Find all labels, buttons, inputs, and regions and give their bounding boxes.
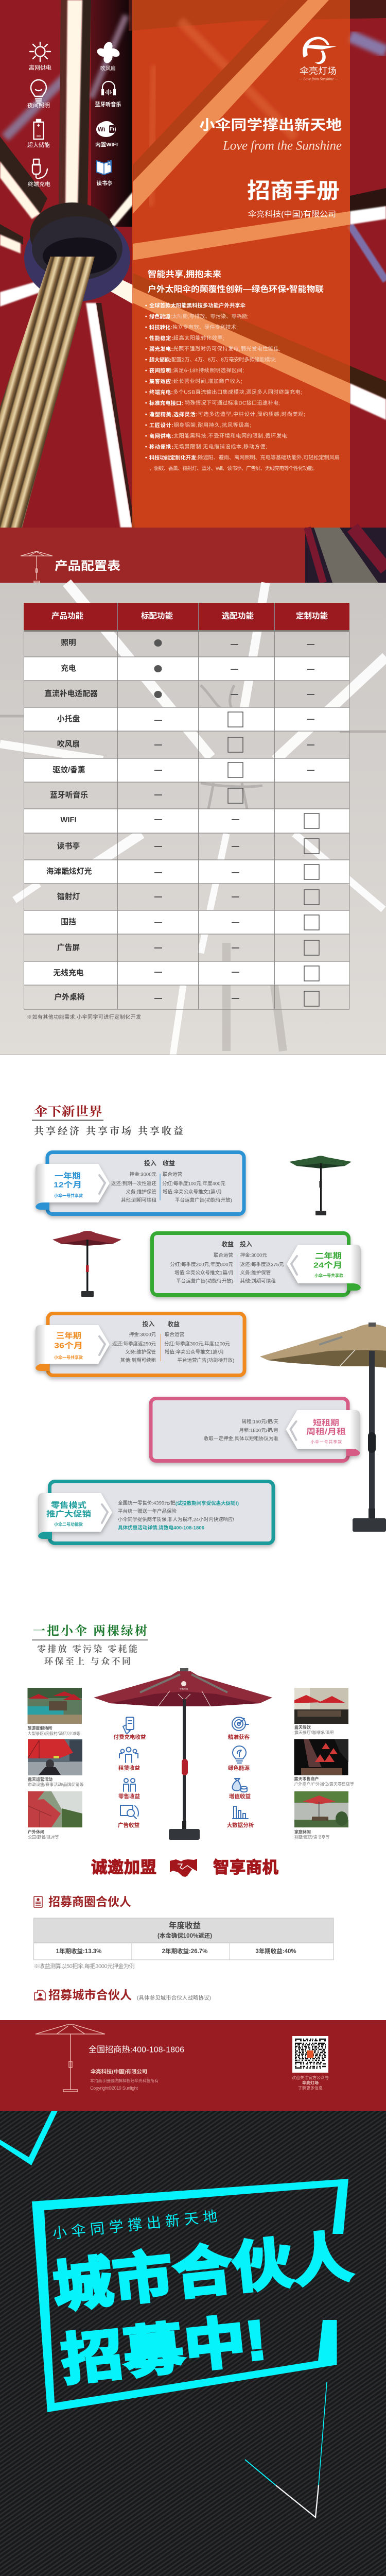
table header: 选配功能 (222, 611, 254, 620)
table grid (24, 603, 349, 1009)
feature list: • (145, 444, 147, 450)
row labels: WIFI (60, 816, 77, 824)
red umbrella product image (52, 1231, 121, 1297)
terms text: 月租:1800元/把/月 (239, 1427, 278, 1433)
terms text (111, 1159, 232, 1204)
icon: paid charging (123, 1717, 134, 1733)
icon: wifi cloud: Wi (98, 126, 105, 133)
ribbon tag (38, 1493, 112, 1539)
dash marks (154, 644, 314, 999)
row labels (44, 638, 98, 1002)
terms text: 收益 (163, 1159, 175, 1167)
icon: big data (233, 1806, 248, 1819)
terms text: 分红:每季度300元,年度1200元 (164, 1341, 230, 1347)
annual income table (34, 1918, 334, 1960)
term label: 推广大促销 (46, 1510, 91, 1519)
feature list: • (145, 434, 147, 439)
label: paid charging: 付费充电收益 (113, 1734, 146, 1740)
icon: green energy (233, 1746, 246, 1763)
label: rental: 租赁收益 (118, 1765, 140, 1771)
row labels: 吹风扇 (57, 739, 80, 749)
icon: handshake (170, 1859, 197, 1877)
icon: value-added (232, 1778, 247, 1792)
subheading: eco first: 环保至上 与众不同 (44, 1654, 131, 1667)
label: storage: 超大储能 (27, 141, 50, 148)
term label: 三年期 (56, 1331, 81, 1341)
QR caption (292, 2075, 329, 2091)
bottom right corner lines (245, 2382, 327, 2517)
table header: 产品功能 (51, 611, 83, 620)
annual income table: 1年期收益:13.3% (56, 1947, 101, 1955)
table header (24, 603, 349, 632)
row labels: 充电 (61, 664, 76, 673)
orange translucent panel (132, 0, 350, 528)
terms text (112, 1320, 234, 1363)
terms text: 平台运营广告(功能待开放) (176, 1278, 233, 1284)
label: precise targeting: 精准获客 (228, 1734, 250, 1740)
terms text: 联合运营 (163, 1172, 182, 1178)
row labels: 广告屏 (57, 943, 80, 952)
label: retail (294, 1776, 354, 1787)
label: leisure: 公园/野餐/派对等 (28, 1834, 59, 1839)
icon: wifi cloud (96, 121, 116, 137)
config section background with light beams (0, 583, 386, 1055)
label: home: 别墅/庭院/读书亭等 (294, 1834, 329, 1839)
photo: open-air dining (294, 1688, 348, 1724)
feature list: 超大储能:配置2万、4万、6万、8万毫安时多款储能模块; (149, 357, 276, 363)
terms text: 平台运营广告(功能待开放) (177, 1357, 234, 1363)
label: open-air dining: 露天餐厅/咖啡馆/酒吧 (294, 1730, 334, 1735)
photo: outdoor event (28, 1739, 82, 1775)
terms text: 增值:伞亮公众号推文1篇/月 (174, 1269, 234, 1276)
row labels: 镭射灯 (57, 892, 80, 901)
term label: 短租期 (313, 1419, 339, 1427)
feature list: • (145, 412, 147, 417)
label: built-in wifi: 内置WIFI (95, 141, 118, 148)
QR code (292, 2036, 328, 2073)
feature list: 绿色能源:太阳能,零排放、零污染、零耗能; (149, 313, 249, 319)
feature list: 性能稳定:超高太阳能转化效率; (149, 335, 224, 341)
feature list: 标准充电接口: 特殊情况下可通过标准DC接口迅速补电; (149, 400, 280, 406)
cyan frame (32, 2179, 348, 2412)
photo: resort (28, 1688, 82, 1724)
annual income table: 年度收益 (169, 1921, 201, 1930)
slogan: 小伞同学撑出新天地 (199, 117, 342, 133)
income footnote: ※收益测算以50把伞,每把3000元押金为例 (34, 1962, 135, 1970)
plan card: three years (36, 1314, 244, 1376)
main title: 招商手册 (247, 178, 340, 203)
label: outdoor event (28, 1776, 83, 1787)
feature list: • (145, 389, 147, 396)
icon: usb (32, 159, 47, 178)
white alternating rows (24, 657, 349, 985)
photo: retail (294, 1739, 348, 1775)
terms text: 其他:到期可续租 (120, 1357, 156, 1363)
tagline: 小伞同学撑出新天地 (51, 2205, 218, 2243)
label: reading: 读书亭 (97, 180, 112, 187)
large red umbrella: 伞亮灯场 (180, 1687, 188, 1690)
row labels: 驱蚊/香薰 (52, 765, 85, 774)
term label: 小伞一号共享款 (310, 1439, 342, 1445)
label: home: 家庭休闲 (294, 1829, 311, 1834)
label: outdoor event: 露天运营活动 (28, 1776, 52, 1782)
hero panel (0, 0, 386, 528)
term label: 小伞一号共享款 (314, 1273, 343, 1278)
terms text (204, 1419, 278, 1442)
label: leisure (28, 1829, 59, 1839)
term label: 一年期 (55, 1172, 81, 1181)
label: home (294, 1829, 329, 1839)
subheading: zero emission: 零排放 零污染 零耗能 (37, 1641, 137, 1655)
terms text: 投入 (240, 1241, 252, 1248)
copyright note: 本招商手册最终解释权归伞亮科技所有 (90, 2078, 159, 2083)
table header: 标配功能 (141, 611, 173, 620)
english slogan: Love from the Sunshine (222, 139, 342, 152)
terms text: 联合运营 (165, 1331, 184, 1337)
label: bluetooth: 蓝牙听音乐 (95, 101, 121, 108)
label: retail: 露天零售商户 (294, 1776, 319, 1782)
feature list: 全球首款太阳能黑科技多功能户外共享伞 (149, 302, 245, 309)
terms text: 押金:3000元 (130, 1172, 156, 1178)
terms text: 全国统一零售价:4399元/把(试投放期间享受优惠大促销!) (118, 1500, 239, 1506)
terms text: 增值:伞亮公众号推文1篇/月 (165, 1349, 224, 1355)
photo: leisure (28, 1791, 82, 1827)
feature list: • (145, 325, 147, 331)
label: charging: 终端充电 (28, 180, 50, 188)
standard dots (154, 639, 162, 698)
slogan: smart business: 智享商机 (213, 1858, 278, 1876)
icon: partner doc (34, 1896, 42, 1907)
term label (54, 1331, 83, 1360)
terms text: 义务:维护保管 (240, 1269, 271, 1276)
hotline: 全国招商热:400-108-1806 (89, 2045, 184, 2055)
terms text: 投入 (144, 1160, 156, 1167)
ribbon tag (36, 1164, 110, 1210)
feature list: 集客效应:延长营业时间,增加商户收入; (149, 378, 242, 384)
terms text: 小伞同学提供两年质保,非人为损坏,24小时内快速响应! (118, 1517, 234, 1523)
label: resort (28, 1725, 80, 1736)
QR caption: 了解更多信息 (298, 2086, 323, 2091)
term label (54, 1172, 83, 1198)
plan card: two years (152, 1233, 361, 1295)
table header: 定制功能 (296, 611, 328, 620)
footer (0, 2020, 386, 2111)
row labels: 围挡 (61, 918, 76, 926)
large red umbrella (94, 1668, 272, 1840)
subheading: sharing economy: 共享经济 共享市场 共享收益 (34, 1123, 183, 1138)
feature list: • (145, 336, 147, 341)
plan card: short-term rental (151, 1398, 360, 1461)
icon: battery (34, 120, 43, 139)
slogan: join: 诚邀加盟 (91, 1858, 156, 1876)
term label: 12个月 (54, 1181, 82, 1189)
headline: city partner: 城市合伙人 (50, 2225, 356, 2319)
row labels: 小托盘 (57, 714, 80, 723)
terms text: 平台统一赠送一年产品保险 (118, 1509, 177, 1515)
terms text: 返还:每季度返375元 (240, 1261, 284, 1267)
company: 伞亮科技(中国)有限公司 (91, 2068, 147, 2075)
row labels: 海滩酷炫灯光 (46, 867, 92, 876)
heading: recruit district partners: 招募商圈合伙人 (48, 1895, 131, 1908)
icon: book (97, 160, 111, 175)
heading: disruptive innovation: 户外太阳伞的颠覆性创新—绿色环保•智能物联 (148, 284, 324, 294)
feature list: • (145, 422, 147, 429)
label: night light: 夜间照明 (27, 101, 50, 109)
terms text: 义务:维护保管 (126, 1189, 156, 1195)
term label: 小伞二号功能款 (54, 1522, 83, 1527)
icon: precise targeting (232, 1717, 249, 1731)
optional / custom check boxes (228, 712, 319, 1006)
terms text: 联合运营 (214, 1252, 233, 1258)
terms text: 收益 (167, 1320, 180, 1328)
icon: bulb (31, 80, 46, 103)
label: retail: 户外商户/户外摊位/露天零售店等 (294, 1782, 354, 1787)
plan card: one year (36, 1152, 244, 1214)
heading: recruit city partners: (具体参见城市合伙人战略协议) (137, 1994, 211, 2001)
icon: retail (124, 1778, 135, 1791)
light beams seen through panel (133, 0, 350, 403)
feature list: 、驱蚊、香薰、镭射灯、蓝牙、Wifi、读书亭、广告屏、无线充电等个性化功能。 (149, 465, 318, 472)
terms text: 分红:每季度200元,年度800元 (170, 1261, 233, 1267)
label: leisure: 户外休闲 (28, 1829, 44, 1834)
terms text: 分红:每季度100元,年度400元 (162, 1181, 225, 1187)
ribbon tag (287, 1245, 361, 1291)
label: off-grid: 离网供电 (29, 64, 51, 71)
config table (24, 603, 349, 1009)
row labels: 直流补电适配器 (44, 689, 98, 698)
photo: home (294, 1791, 348, 1827)
label: open-air dining (294, 1725, 334, 1735)
term label: 周租/月租 (306, 1427, 346, 1436)
footer umbrella outline (36, 2025, 105, 2092)
headline: recruiting: 招募中! (58, 2308, 269, 2392)
logo: 伞亮灯场 (300, 66, 337, 76)
config footnote: ※如有其他功能需求,小伞同学可进行定制化开发 (27, 1014, 141, 1020)
terms text: 其他:到期可续租 (240, 1278, 276, 1284)
copyright note: Copyright©2019 Sunlight (90, 2086, 138, 2091)
icon: wifi cloud: Fi (110, 127, 114, 132)
term label (313, 1251, 343, 1278)
row labels: 读书亭 (57, 841, 80, 851)
terms text: 押金:3000元 (129, 1331, 156, 1337)
row labels: 蓝牙听音乐 (50, 790, 88, 800)
label: resort: 旅游度假场所 (28, 1725, 52, 1731)
feature list: • (145, 368, 147, 374)
row labels: 户外桌椅 (54, 992, 85, 1002)
feature list: 夜间照明:满足6-18h持续照明选择区间; (149, 367, 244, 374)
label: value-added: 增值收益 (229, 1793, 251, 1800)
heading: one umbrella two trees: 一把小伞 两棵绿树 (33, 1621, 147, 1638)
row labels: 照明 (61, 638, 76, 647)
term label (306, 1419, 346, 1445)
feature list: 科技功能定制化开发:除遮阳、避雨、离网照明、充电等基础功能外,可轻松定制风扇 (149, 454, 340, 461)
copyright note (90, 2078, 159, 2091)
feature list: • (145, 401, 147, 406)
terms text (170, 1240, 284, 1284)
icon: advertising (120, 1805, 138, 1819)
feature list: • (145, 455, 147, 461)
icon: rental (119, 1748, 138, 1762)
feature list: • (145, 314, 147, 319)
terms text: 其他:到期可续租 (121, 1197, 156, 1204)
ribbon tag (36, 1325, 110, 1371)
heading: smart sharing: 智能共享,拥抱未来 (148, 269, 221, 279)
feature list: 终端充电:多个USB直流输出口集成模块,满足多人同时终端充电; (149, 388, 302, 396)
green umbrella product image (289, 1156, 352, 1215)
plan card: retail (38, 1482, 273, 1544)
dark striped recruitment poster (0, 2111, 386, 2576)
feature list (145, 302, 340, 472)
terms text: 平台运营广告(功能待开放) (175, 1197, 232, 1204)
terms text: 义务:维护保管 (125, 1349, 156, 1355)
term label: 小伞一号共享款 (54, 1193, 83, 1198)
heading: new world under the umbrella: 伞下新世界 (34, 1101, 102, 1119)
terms text: 投入 (142, 1320, 154, 1328)
ribbon tag (286, 1410, 360, 1456)
logo: — Love from Sunshine — (299, 76, 339, 81)
annual income table: 3年期收益:40% (255, 1947, 296, 1955)
cyan chevron top left (0, 2111, 58, 2165)
feature list: • (145, 379, 147, 384)
icon: umbrella outline (21, 551, 52, 583)
terms text: 周租:150元/把/天 (242, 1419, 278, 1425)
QR caption: 伞亮灯场 (302, 2080, 319, 2086)
terms text: 返还:每季度返250元 (112, 1341, 156, 1347)
terms text: 收取一定押金,具体以短租协议为准 (204, 1435, 278, 1442)
label: advertising: 广告收益 (118, 1822, 139, 1828)
icon: headphones (102, 81, 115, 95)
terms text: 返还:到期一次性返还 (111, 1181, 156, 1187)
label: open-air dining: 露天餐饮 (294, 1725, 311, 1730)
heading: product configuration: 产品配置表 (55, 559, 120, 572)
label: big data: 大数据分析 (227, 1822, 254, 1828)
icon: fan (97, 42, 119, 63)
label: outdoor event: 市政设施/赛事活动/品牌促销等 (28, 1782, 83, 1787)
label: retail income: 零售收益 (118, 1793, 140, 1800)
feature list: 科技转化:独立专有软、硬件专利技术; (149, 324, 238, 331)
label: resort: 大型景区/度假村/酒店/沙滩等 (28, 1731, 80, 1736)
company name: 伞亮科技(中国)有限公司 (248, 210, 336, 218)
feature list: 移动便携:无场景限制,无电缆铺设成本,移动方便; (149, 443, 267, 450)
icon: city partner doc (34, 1990, 45, 2000)
feature list: • (145, 346, 147, 352)
terms text: 押金:3000元 (240, 1252, 267, 1258)
terms text: 具体优惠活动详情,请致电400-108-1806 (118, 1525, 204, 1531)
term label: 二年期 (315, 1251, 342, 1260)
icon: sun (30, 42, 50, 61)
term label: 小伞一号共享款 (54, 1355, 83, 1360)
feature list: 离网供电:太阳能黑科技,不受环境和电网的限制,循环发电; (149, 433, 289, 439)
term label (46, 1500, 91, 1527)
row labels: 无线充电 (53, 968, 84, 977)
annual income table: 2年期收益:26.7% (162, 1947, 207, 1955)
term label: 36个月 (54, 1342, 83, 1350)
terms text: 增值:伞亮公众号推文1篇/月 (163, 1189, 222, 1195)
QR caption: 欢迎关注官方公众号 (292, 2075, 329, 2080)
logo (299, 37, 339, 81)
label: fan: 吹风扇 (100, 65, 116, 72)
label: green energy: 绿色能源 (228, 1765, 250, 1771)
heading: recruit city partners (34, 1988, 211, 2002)
terms text: 收益 (221, 1240, 234, 1248)
feature list: • (145, 358, 147, 363)
annual income table: (本金确保100%返还) (157, 1932, 212, 1939)
term label: 24个月 (313, 1261, 342, 1269)
hero photo: umbrella ribs and light beams (0, 0, 386, 528)
config section header band (0, 528, 386, 583)
feature list: 造型精美,选择灵活:可选多边造型,中柱设计,简约质感,时尚美观; (149, 411, 305, 417)
feature list: 工匠设计:钢身铝架,耐用持久,抗风等级高; (149, 421, 251, 429)
term label: 零售模式 (51, 1500, 86, 1510)
heading: recruit city partners: 招募城市合伙人 (48, 1988, 132, 2002)
tan umbrella large product image (260, 1323, 386, 1532)
feature list: 弱光发电:光照不强烈时仍可保持发电,弱光发电性能佳; (149, 345, 280, 352)
terms text (118, 1500, 239, 1531)
feature list: • (145, 303, 147, 309)
